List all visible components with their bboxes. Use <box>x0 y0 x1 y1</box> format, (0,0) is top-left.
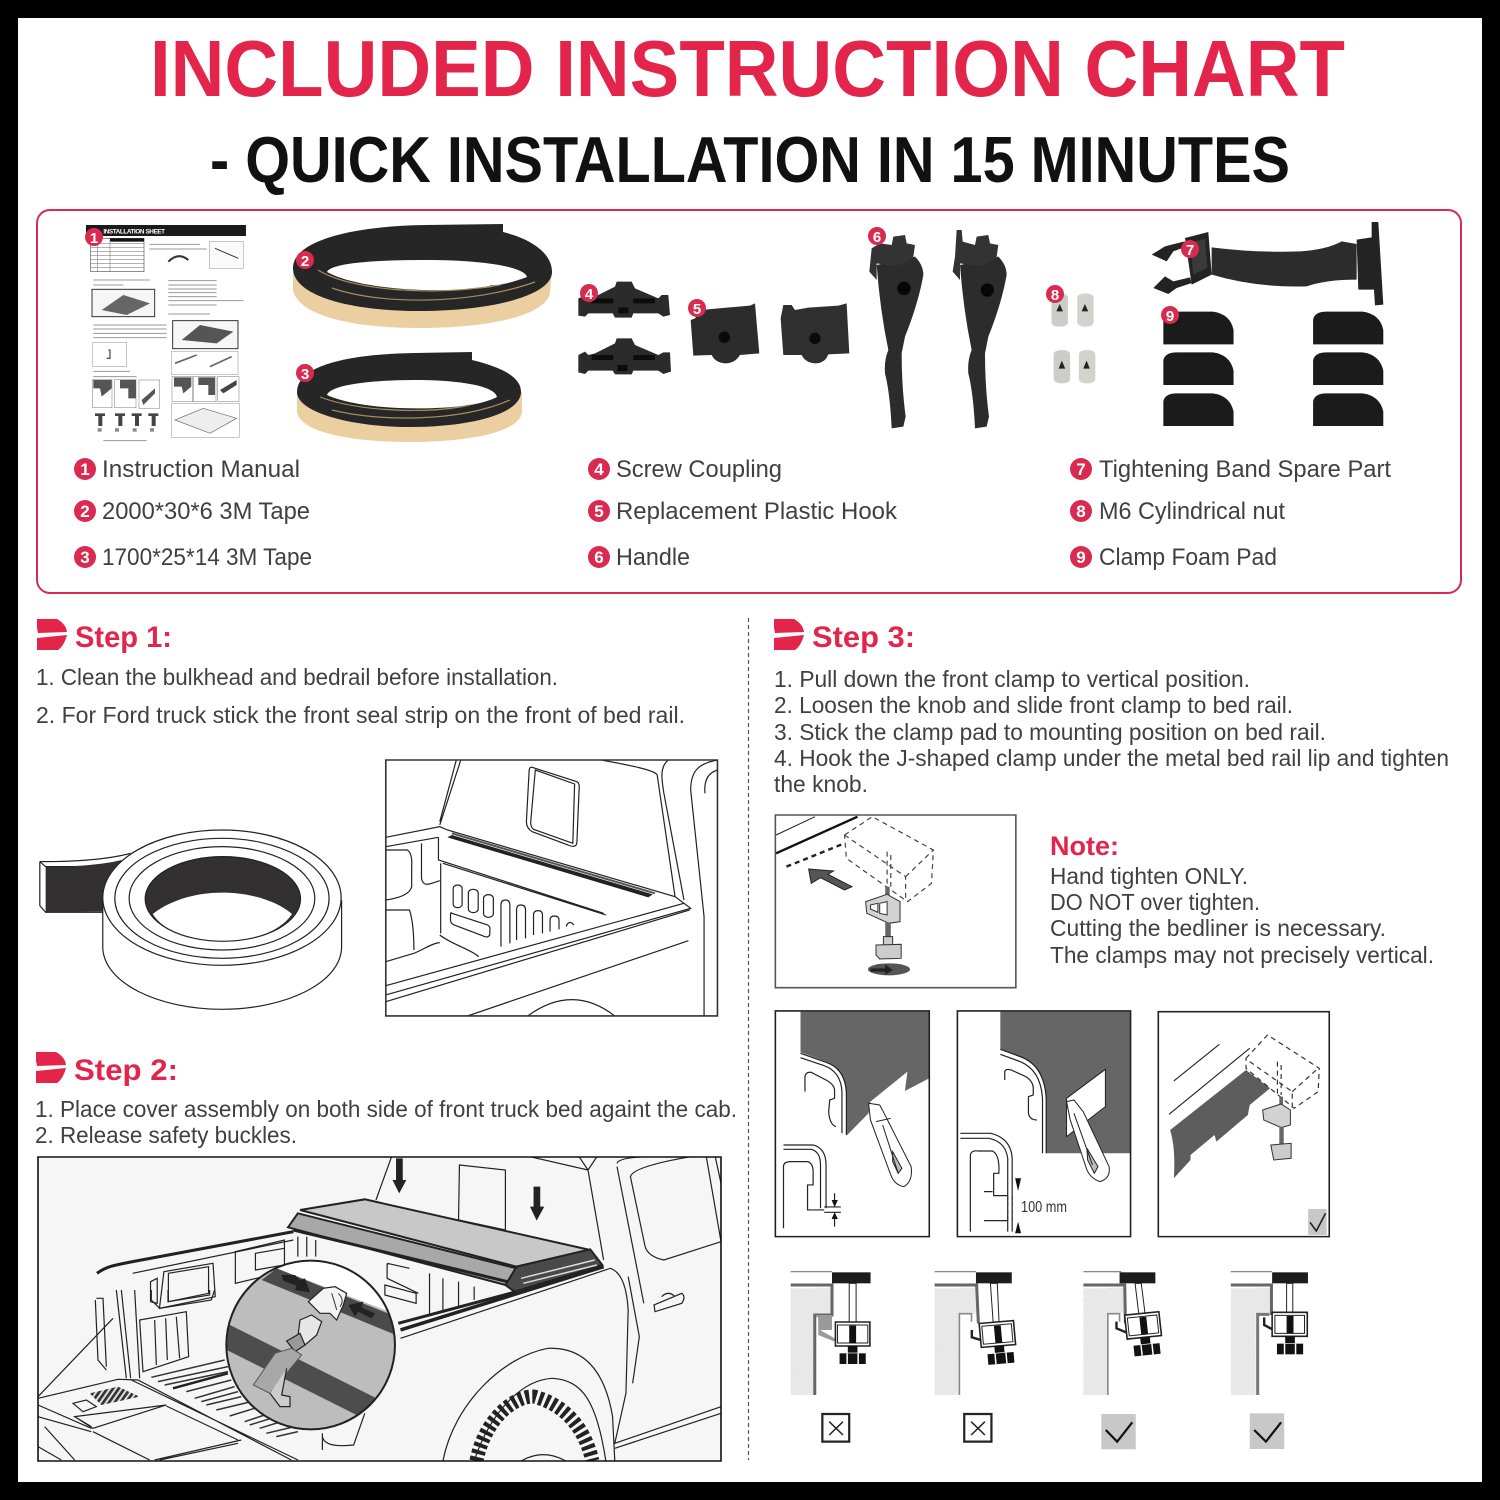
parts legend: 7 <box>1076 460 1086 479</box>
title: INCLUDED INSTRUCTION CHART <box>150 24 1345 113</box>
heading: step 1 <box>37 619 172 654</box>
text: step 1 instructions: 2. For Ford truck stick the front seal strip on the front of bed rail. <box>36 702 685 728</box>
note: DO NOT over tighten. <box>1050 889 1260 915</box>
part: instruction manual sheet: INSTALLATION SHEET <box>103 228 165 235</box>
number badges on parts: 9 <box>1166 308 1174 325</box>
label: 100 mm: 100 mm <box>1021 1199 1067 1216</box>
text: step 3 instructions: 4. Hook the J-shaped clamp under the metal bed rail lip and tighten <box>774 745 1449 771</box>
part: clamp foam pads <box>1163 312 1383 426</box>
parts legend: 8 <box>1076 502 1086 521</box>
illustration: clamp position right 1 <box>1083 1272 1163 1395</box>
text: step 3 instructions <box>774 666 1449 797</box>
parts legend: 6 <box>594 548 604 567</box>
number badges on parts: 4 <box>585 286 594 303</box>
text: step 3 instructions: 1. Pull down the front clamp to vertical position. <box>774 666 1250 692</box>
parts legend: Handle <box>616 544 690 571</box>
heading: step 2: Step 2: <box>74 1054 178 1087</box>
note: Cutting the bedliner is necessary. <box>1050 915 1386 941</box>
number badges on parts: 6 <box>873 229 881 246</box>
part: screw couplings <box>578 282 671 374</box>
truck body and cover <box>97 1157 721 1461</box>
part: instruction manual sheet <box>86 225 246 441</box>
part: replacement plastic hooks <box>691 303 849 363</box>
heading: step 3 <box>774 619 915 654</box>
parts legend: 2 <box>80 502 90 521</box>
note: Hand tighten ONLY. <box>1050 863 1248 889</box>
parts legend: 3 <box>80 548 90 567</box>
illustration: clamp position right 2 <box>1231 1272 1308 1395</box>
text: step 3 instructions: the knob. <box>774 771 868 797</box>
buckle detail magnifier <box>225 1260 396 1430</box>
illustration: clamp position wrong 2 <box>935 1272 1017 1395</box>
illustration: cutting bedliner notch <box>775 1011 929 1237</box>
number badges on parts: 1 <box>90 230 98 247</box>
number badges on parts: 7 <box>1186 242 1194 259</box>
parts legend: Replacement Plastic Hook <box>616 498 898 525</box>
heading: step 2 <box>36 1052 178 1087</box>
parts legend: 1 <box>80 460 90 479</box>
parts legend: Clamp Foam Pad <box>1099 544 1277 571</box>
heading: step 1: Step 1: <box>75 621 172 654</box>
text: step 1 instructions: 1. Clean the bulkhead and bedrail before installation. <box>36 664 558 690</box>
icon: right mark 1 <box>1101 1414 1136 1449</box>
parts legend: Instruction Manual <box>102 456 300 483</box>
text: step 1 instructions <box>36 664 685 728</box>
dashed divider <box>748 618 750 1460</box>
part: tightening band <box>1152 222 1383 305</box>
parts legend <box>74 456 1391 571</box>
number badges on parts: 5 <box>693 301 701 318</box>
icon: wrong mark 2 <box>964 1414 991 1442</box>
icon: right mark 2 <box>1250 1413 1284 1449</box>
text: step 2 instructions: 1. Place cover assembly on both side of front truck bed againt the cab. <box>35 1096 737 1122</box>
parts legend: 4 <box>594 460 604 479</box>
icon: wrong mark 1 <box>822 1414 849 1442</box>
parts legend: 9 <box>1076 548 1086 567</box>
text: step 3 instructions: 2. Loosen the knob and slide front clamp to bed rail. <box>774 692 1293 718</box>
illustration: clamp position wrong 1 <box>791 1272 871 1395</box>
illustration: cover placed on truck bed with buckle detail <box>38 1157 721 1461</box>
illustration: seal tape roll <box>40 830 342 1009</box>
number badges on parts: 2 <box>301 253 309 270</box>
part: 3M tape roll small <box>297 352 522 442</box>
illustration: seal strip on truck bed <box>386 760 717 1016</box>
heading: step 3: Step 3: <box>812 621 915 654</box>
illustration: pad and clamp mounted on bed rail <box>1158 1012 1329 1237</box>
note: The clamps may not precisely vertical. <box>1050 942 1434 968</box>
parts legend: M6 Cylindrical nut <box>1099 498 1285 525</box>
illustration: cutting 100 mm opening <box>957 1011 1131 1237</box>
tailgate and bed floor <box>38 1290 298 1460</box>
subtitle: - QUICK INSTALLATION IN 15 MINUTES <box>210 123 1290 196</box>
parts legend: Screw Coupling <box>616 456 782 483</box>
part: 3M tape roll large <box>293 224 552 328</box>
text: step 3 instructions: 3. Stick the clamp pad to mounting position on bed rail. <box>774 719 1326 745</box>
parts legend: 5 <box>594 502 604 521</box>
part: handles <box>869 230 1007 428</box>
parts legend: 1700*25*14 3M Tape <box>102 544 312 571</box>
number badges on parts: 8 <box>1051 287 1059 304</box>
parts legend: 2000*30*6 3M Tape <box>102 498 310 525</box>
number badges on parts: 3 <box>301 366 309 383</box>
text: step 2 instructions <box>35 1096 737 1148</box>
note: Note: <box>1050 831 1119 861</box>
illustration: slide clamp to bed rail <box>775 815 1016 988</box>
text: step 2 instructions: 2. Release safety buckles. <box>35 1122 297 1148</box>
number badges on parts <box>85 227 1199 383</box>
note <box>1050 831 1434 968</box>
panel: included parts <box>37 210 1461 593</box>
parts legend: Tightening Band Spare Part <box>1099 456 1391 483</box>
part: M6 cylindrical nuts <box>1051 293 1095 383</box>
